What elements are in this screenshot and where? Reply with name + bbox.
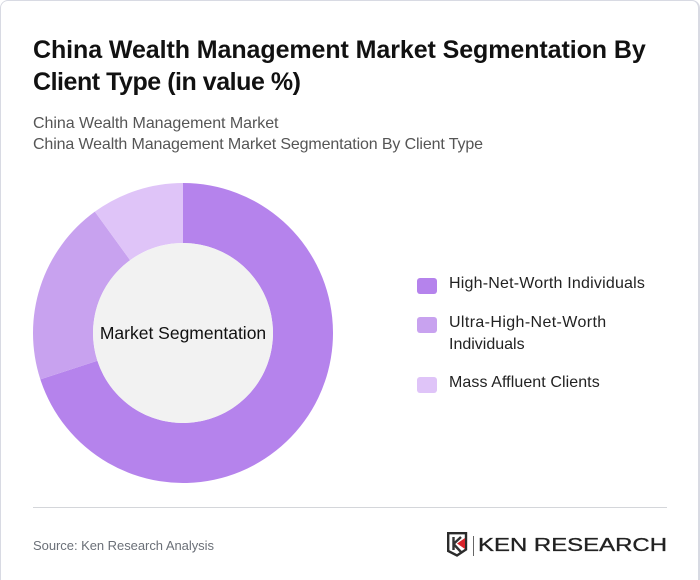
logo: Ken Research <box>447 532 667 557</box>
legend swatch: Mass Affluent Clients <box>417 377 437 393</box>
donut center <box>93 243 273 423</box>
source note: Source: Ken Research Analysis <box>33 538 214 553</box>
legend label: Ultra-High-Net-Worth Individuals: Individuals <box>449 336 525 353</box>
legend label: Ultra-High-Net-Worth Individuals: Ultra-High-Net-Worth <box>449 314 607 331</box>
title <box>33 36 646 96</box>
segment: Ultra-High-Net-Worth Individuals 20% <box>33 212 130 379</box>
legend label: Mass Affluent Clients: Mass Affluent Clients <box>449 374 600 391</box>
donut chart <box>33 183 333 483</box>
title: China Wealth Management Market Segmentation By <box>33 36 646 64</box>
footer divider <box>33 507 667 508</box>
legend label: Ultra-High-Net-Worth Individuals <box>449 314 607 353</box>
subtitle: China Wealth Management Market Segmentation By Client Type <box>33 136 483 153</box>
legend swatch: Ultra-High-Net-Worth Individuals <box>417 317 437 333</box>
subtitle: China Wealth Management Market <box>33 115 278 132</box>
logo wordmark: KEN RESEARCH <box>478 535 667 555</box>
segment: Mass Affluent Clients 10% <box>95 183 183 260</box>
title: Client Type (in value %) <box>33 68 300 96</box>
logo separator <box>473 536 474 556</box>
legend swatch: High-Net-Worth Individuals <box>417 278 437 294</box>
legend <box>417 275 645 393</box>
segment: High-Net-Worth Individuals 70% <box>40 183 333 483</box>
center label: Market Segmentation <box>100 323 266 343</box>
subtitle <box>33 115 483 153</box>
legend label: High-Net-Worth Individuals: High-Net-Worth Individuals <box>449 275 645 292</box>
logo icon: shield <box>448 533 466 556</box>
